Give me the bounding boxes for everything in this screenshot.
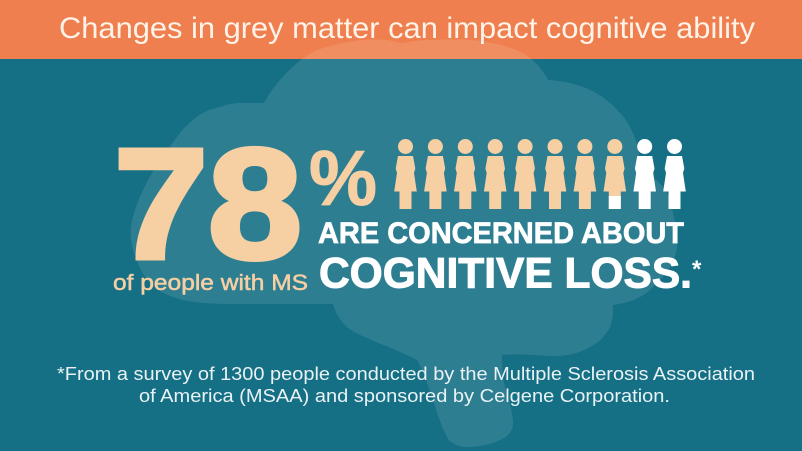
asterisk: * <box>692 256 702 283</box>
title: Changes in grey matter can impact cognitive ability <box>59 12 755 45</box>
figure 6 <box>544 139 566 209</box>
figure 10 <box>663 139 686 209</box>
footnote: *From a survey of 1300 people conducted by the Multiple Sclerosis Association <box>57 363 755 384</box>
figure 4 <box>484 139 507 209</box>
pictogram: 8 of 10 people <box>394 139 686 209</box>
figure 8 <box>604 139 626 209</box>
are concerned about: ARE CONCERNED ABOUT <box>318 217 684 250</box>
brain silhouette <box>131 39 677 447</box>
figure 9 <box>633 139 656 209</box>
figure 2 <box>424 139 447 209</box>
figure 5 <box>514 139 536 209</box>
of people with MS: of people with MS <box>113 270 308 295</box>
footnote <box>57 363 755 406</box>
figure 7 <box>574 139 596 209</box>
percent sign: % <box>309 134 377 222</box>
big number 78: 78 <box>114 117 302 292</box>
figure 1 <box>394 139 417 209</box>
footnote: of America (MSAA) and sponsored by Celgene Corporation. <box>139 385 670 406</box>
cognitive loss: COGNITIVE LOSS. <box>319 250 692 298</box>
title banner <box>0 0 802 59</box>
figure 3 <box>454 139 477 209</box>
